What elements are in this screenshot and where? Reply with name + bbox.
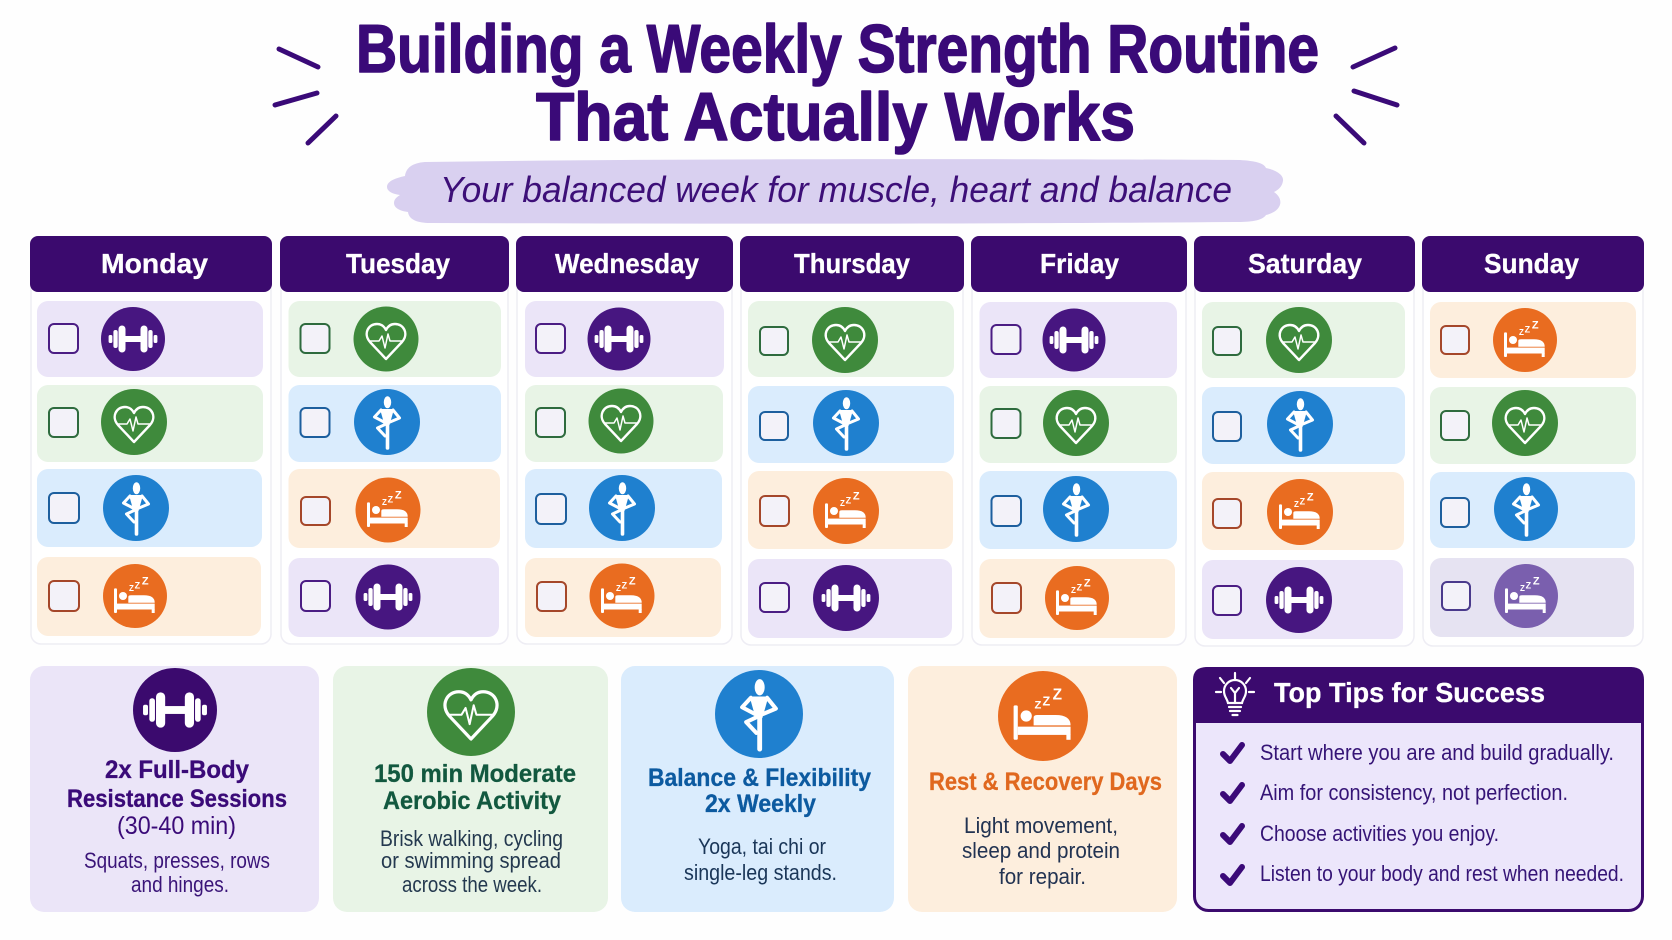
Saturday rest row: Z bbox=[1294, 500, 1299, 509]
subtitle banner bbox=[387, 159, 1283, 224]
icon: heart bbox=[427, 668, 515, 756]
aerobic heading: 150 min Moderate bbox=[374, 760, 576, 788]
panel: Saturday column bbox=[1194, 236, 1415, 646]
rest description bbox=[962, 813, 1120, 889]
aerobic description: Brisk walking, cycling bbox=[380, 826, 563, 851]
Thursday header: Thursday bbox=[794, 248, 910, 279]
resistance heading: Resistance Sessions bbox=[67, 785, 287, 813]
Monday rest row: Z bbox=[129, 584, 134, 593]
rest description: sleep and protein bbox=[962, 838, 1120, 863]
Tuesday strength row bbox=[288, 558, 499, 637]
Tuesday rest row: Z bbox=[388, 494, 394, 504]
title bbox=[356, 11, 1319, 155]
panel: rest summary bbox=[908, 666, 1177, 912]
panel: Friday column bbox=[971, 236, 1187, 645]
Sunday light rest row: Z bbox=[1533, 575, 1540, 587]
Friday cardio row bbox=[980, 386, 1177, 463]
resistance heading: (30-40 min) bbox=[117, 812, 236, 840]
Thursday cardio row bbox=[748, 301, 954, 377]
Tuesday rest row bbox=[288, 469, 500, 548]
balance heading: 2x Weekly bbox=[705, 790, 816, 818]
rest description: Light movement, bbox=[964, 813, 1118, 838]
Thursday rest row: Z bbox=[846, 495, 852, 505]
Tuesday header: Tuesday bbox=[346, 248, 450, 279]
Friday balance row bbox=[980, 471, 1177, 549]
Monday cardio row bbox=[37, 385, 263, 462]
title: That Actually Works bbox=[536, 79, 1135, 155]
Wednesday strength row bbox=[525, 301, 724, 377]
icon: bed: Z bbox=[1035, 700, 1042, 712]
Monday header: Monday bbox=[101, 248, 208, 279]
icon: light bulb bbox=[1216, 673, 1254, 715]
Saturday header: Saturday bbox=[1248, 248, 1362, 279]
tips header: Top Tips for Success bbox=[1274, 677, 1545, 708]
left accent lines bbox=[275, 49, 336, 143]
Saturday strength row bbox=[1202, 560, 1403, 639]
aerobic heading: Aerobic Activity bbox=[383, 787, 561, 815]
aerobic description: across the week. bbox=[402, 872, 542, 897]
panel: resistance summary bbox=[30, 666, 319, 912]
Tuesday cardio row bbox=[288, 301, 501, 377]
Tuesday balance row bbox=[288, 385, 501, 462]
icon: bed: Z bbox=[1043, 694, 1051, 708]
panel: Thursday column bbox=[740, 236, 964, 645]
Sunday rest row: Z bbox=[1532, 319, 1539, 331]
aerobic description bbox=[380, 826, 563, 897]
Friday rest row: Z bbox=[1084, 577, 1091, 589]
resistance description bbox=[84, 848, 270, 897]
resistance description: Squats, presses, rows bbox=[84, 848, 270, 873]
panel: balance summary bbox=[621, 666, 894, 912]
panel: Tuesday column bbox=[280, 236, 509, 644]
Wednesday rest row: Z bbox=[629, 575, 636, 587]
resistance description: and hinges. bbox=[131, 872, 229, 897]
Friday header: Friday bbox=[1040, 248, 1119, 279]
icon: dumbbell bbox=[133, 668, 217, 752]
icon: bed: Z bbox=[1053, 687, 1062, 704]
Friday rest row bbox=[980, 559, 1175, 638]
tip 3: Choose activities you enjoy. bbox=[1260, 821, 1499, 846]
Sunday balance row bbox=[1430, 472, 1635, 548]
Monday rest row bbox=[37, 557, 261, 636]
Wednesday header: Wednesday bbox=[555, 248, 699, 279]
Monday rest row: Z bbox=[142, 575, 149, 587]
Sunday light rest row: Z bbox=[1520, 584, 1525, 593]
Saturday balance row bbox=[1202, 387, 1405, 464]
Wednesday header bbox=[516, 236, 733, 292]
Sunday light rest row bbox=[1430, 558, 1634, 637]
Saturday rest row: Z bbox=[1300, 496, 1306, 506]
Saturday rest row: Z bbox=[1307, 491, 1314, 503]
panel: Monday column bbox=[30, 236, 272, 644]
Sunday header: Sunday bbox=[1484, 248, 1579, 279]
Wednesday rest row bbox=[525, 558, 721, 637]
Thursday balance row bbox=[748, 386, 954, 463]
Monday header bbox=[30, 236, 272, 292]
Thursday rest row: Z bbox=[840, 499, 845, 508]
aerobic description: or swimming spread bbox=[381, 848, 561, 873]
Friday header bbox=[971, 236, 1187, 292]
balance description: Yoga, tai chi or bbox=[698, 834, 826, 859]
Wednesday balance row bbox=[525, 469, 722, 548]
panel: Sunday column bbox=[1422, 236, 1644, 646]
tips header bbox=[1193, 667, 1644, 723]
tip 2: Aim for consistency, not perfection. bbox=[1260, 780, 1568, 805]
title: Building a Weekly Strength Routine bbox=[356, 11, 1319, 87]
tip 1: Start where you are and build gradually. bbox=[1260, 740, 1614, 765]
panel: top tips bbox=[1193, 667, 1644, 910]
Wednesday cardio row bbox=[525, 385, 723, 462]
Monday balance row bbox=[37, 469, 262, 547]
icon: bed bbox=[998, 671, 1088, 761]
Sunday rest row: Z bbox=[1525, 324, 1531, 334]
Saturday header bbox=[1194, 236, 1415, 292]
Thursday rest row: Z bbox=[853, 490, 860, 502]
tip 4: Listen to your body and rest when needed. bbox=[1260, 861, 1624, 886]
Thursday rest row bbox=[748, 471, 953, 549]
Tuesday rest row: Z bbox=[395, 489, 402, 501]
Tuesday rest row: Z bbox=[382, 498, 387, 507]
Thursday header bbox=[740, 236, 964, 292]
Tuesday header bbox=[280, 236, 509, 292]
Sunday cardio row bbox=[1430, 387, 1636, 464]
Friday rest row: Z bbox=[1071, 586, 1076, 595]
subtitle banner: Your balanced week for muscle, heart and balance bbox=[440, 169, 1232, 210]
Friday rest row: Z bbox=[1077, 582, 1083, 592]
Monday strength row bbox=[37, 301, 263, 377]
resistance heading bbox=[67, 756, 287, 840]
panel: Wednesday column bbox=[516, 236, 733, 644]
Thursday strength row bbox=[748, 559, 952, 638]
icon: balance figure bbox=[715, 670, 803, 758]
balance heading bbox=[648, 764, 871, 818]
Sunday header bbox=[1422, 236, 1644, 292]
Wednesday rest row: Z bbox=[616, 584, 621, 593]
Friday strength row bbox=[980, 302, 1177, 378]
resistance heading: 2x Full-Body bbox=[105, 756, 249, 784]
Saturday rest row bbox=[1202, 472, 1404, 550]
Saturday cardio row bbox=[1202, 302, 1405, 378]
aerobic heading bbox=[374, 760, 576, 815]
balance heading: Balance & Flexibility bbox=[648, 764, 871, 792]
balance description bbox=[684, 834, 837, 885]
balance description: single-leg stands. bbox=[684, 860, 837, 885]
Sunday light rest row: Z bbox=[1526, 580, 1532, 590]
right accent lines bbox=[1336, 48, 1397, 143]
rest description: for repair. bbox=[999, 864, 1086, 889]
Monday rest row: Z bbox=[135, 580, 141, 590]
Sunday rest row bbox=[1430, 302, 1636, 378]
Wednesday rest row: Z bbox=[622, 580, 628, 590]
panel: aerobic summary bbox=[333, 666, 608, 912]
Sunday rest row: Z bbox=[1519, 328, 1524, 337]
rest heading: Rest & Recovery Days bbox=[929, 768, 1162, 796]
